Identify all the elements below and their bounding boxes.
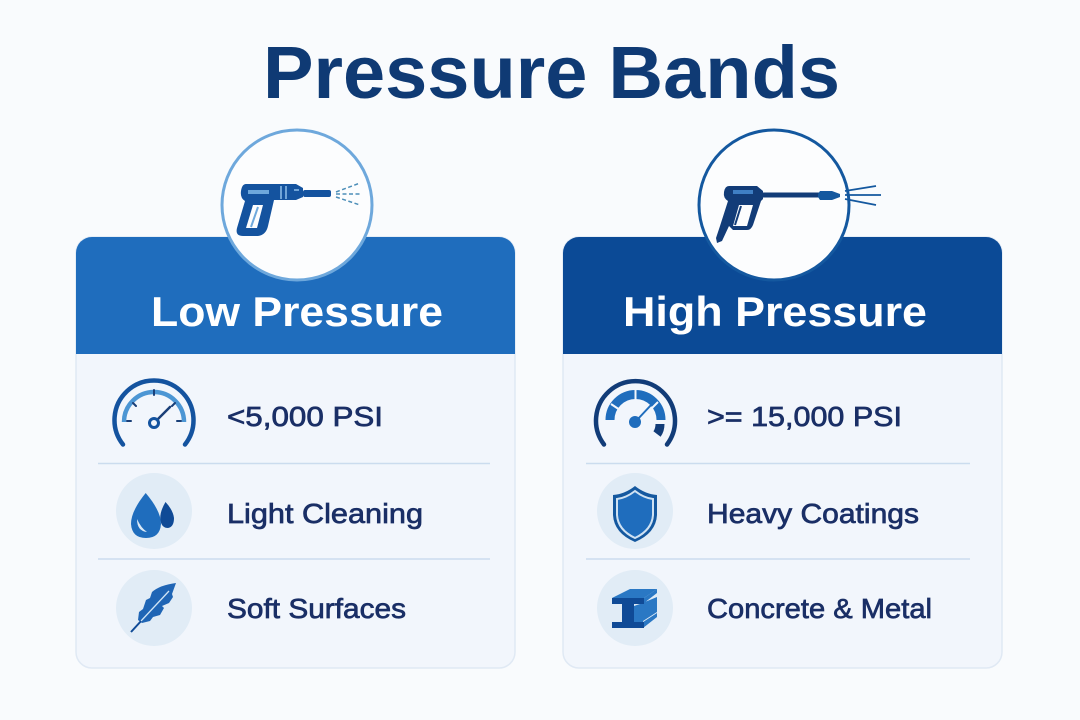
panel body bbox=[76, 237, 515, 668]
title: Pressure Bands bbox=[263, 31, 840, 114]
heading: high pressure: High Pressure bbox=[623, 288, 927, 335]
icon: high pressure gauge bbox=[596, 381, 675, 444]
label: soft surfaces: Soft Surfaces bbox=[227, 593, 406, 624]
icon: shield bbox=[597, 473, 673, 549]
label: light cleaning: Light Cleaning bbox=[227, 498, 423, 529]
panel: low pressure bbox=[76, 130, 515, 668]
icon: high pressure washer gun bbox=[699, 130, 881, 280]
value: high pressure psi: >= 15,000 PSI bbox=[707, 401, 902, 432]
icon: low pressure gauge bbox=[115, 381, 194, 444]
value: low pressure psi: <5,000 PSI bbox=[227, 401, 383, 432]
header band: low pressure bbox=[76, 237, 515, 354]
label: heavy coatings: Heavy Coatings bbox=[707, 498, 919, 529]
panel body bbox=[563, 237, 1002, 668]
icon: low pressure washer gun bbox=[222, 130, 372, 280]
panel: high pressure bbox=[563, 130, 1002, 668]
heading: low pressure: Low Pressure bbox=[151, 288, 443, 335]
icon: steel beam bbox=[597, 570, 673, 646]
icon: water drops bbox=[116, 473, 192, 549]
header band: high pressure bbox=[563, 237, 1002, 354]
icon: feather bbox=[116, 570, 192, 646]
label: concrete and metal: Concrete & Metal bbox=[707, 593, 932, 624]
